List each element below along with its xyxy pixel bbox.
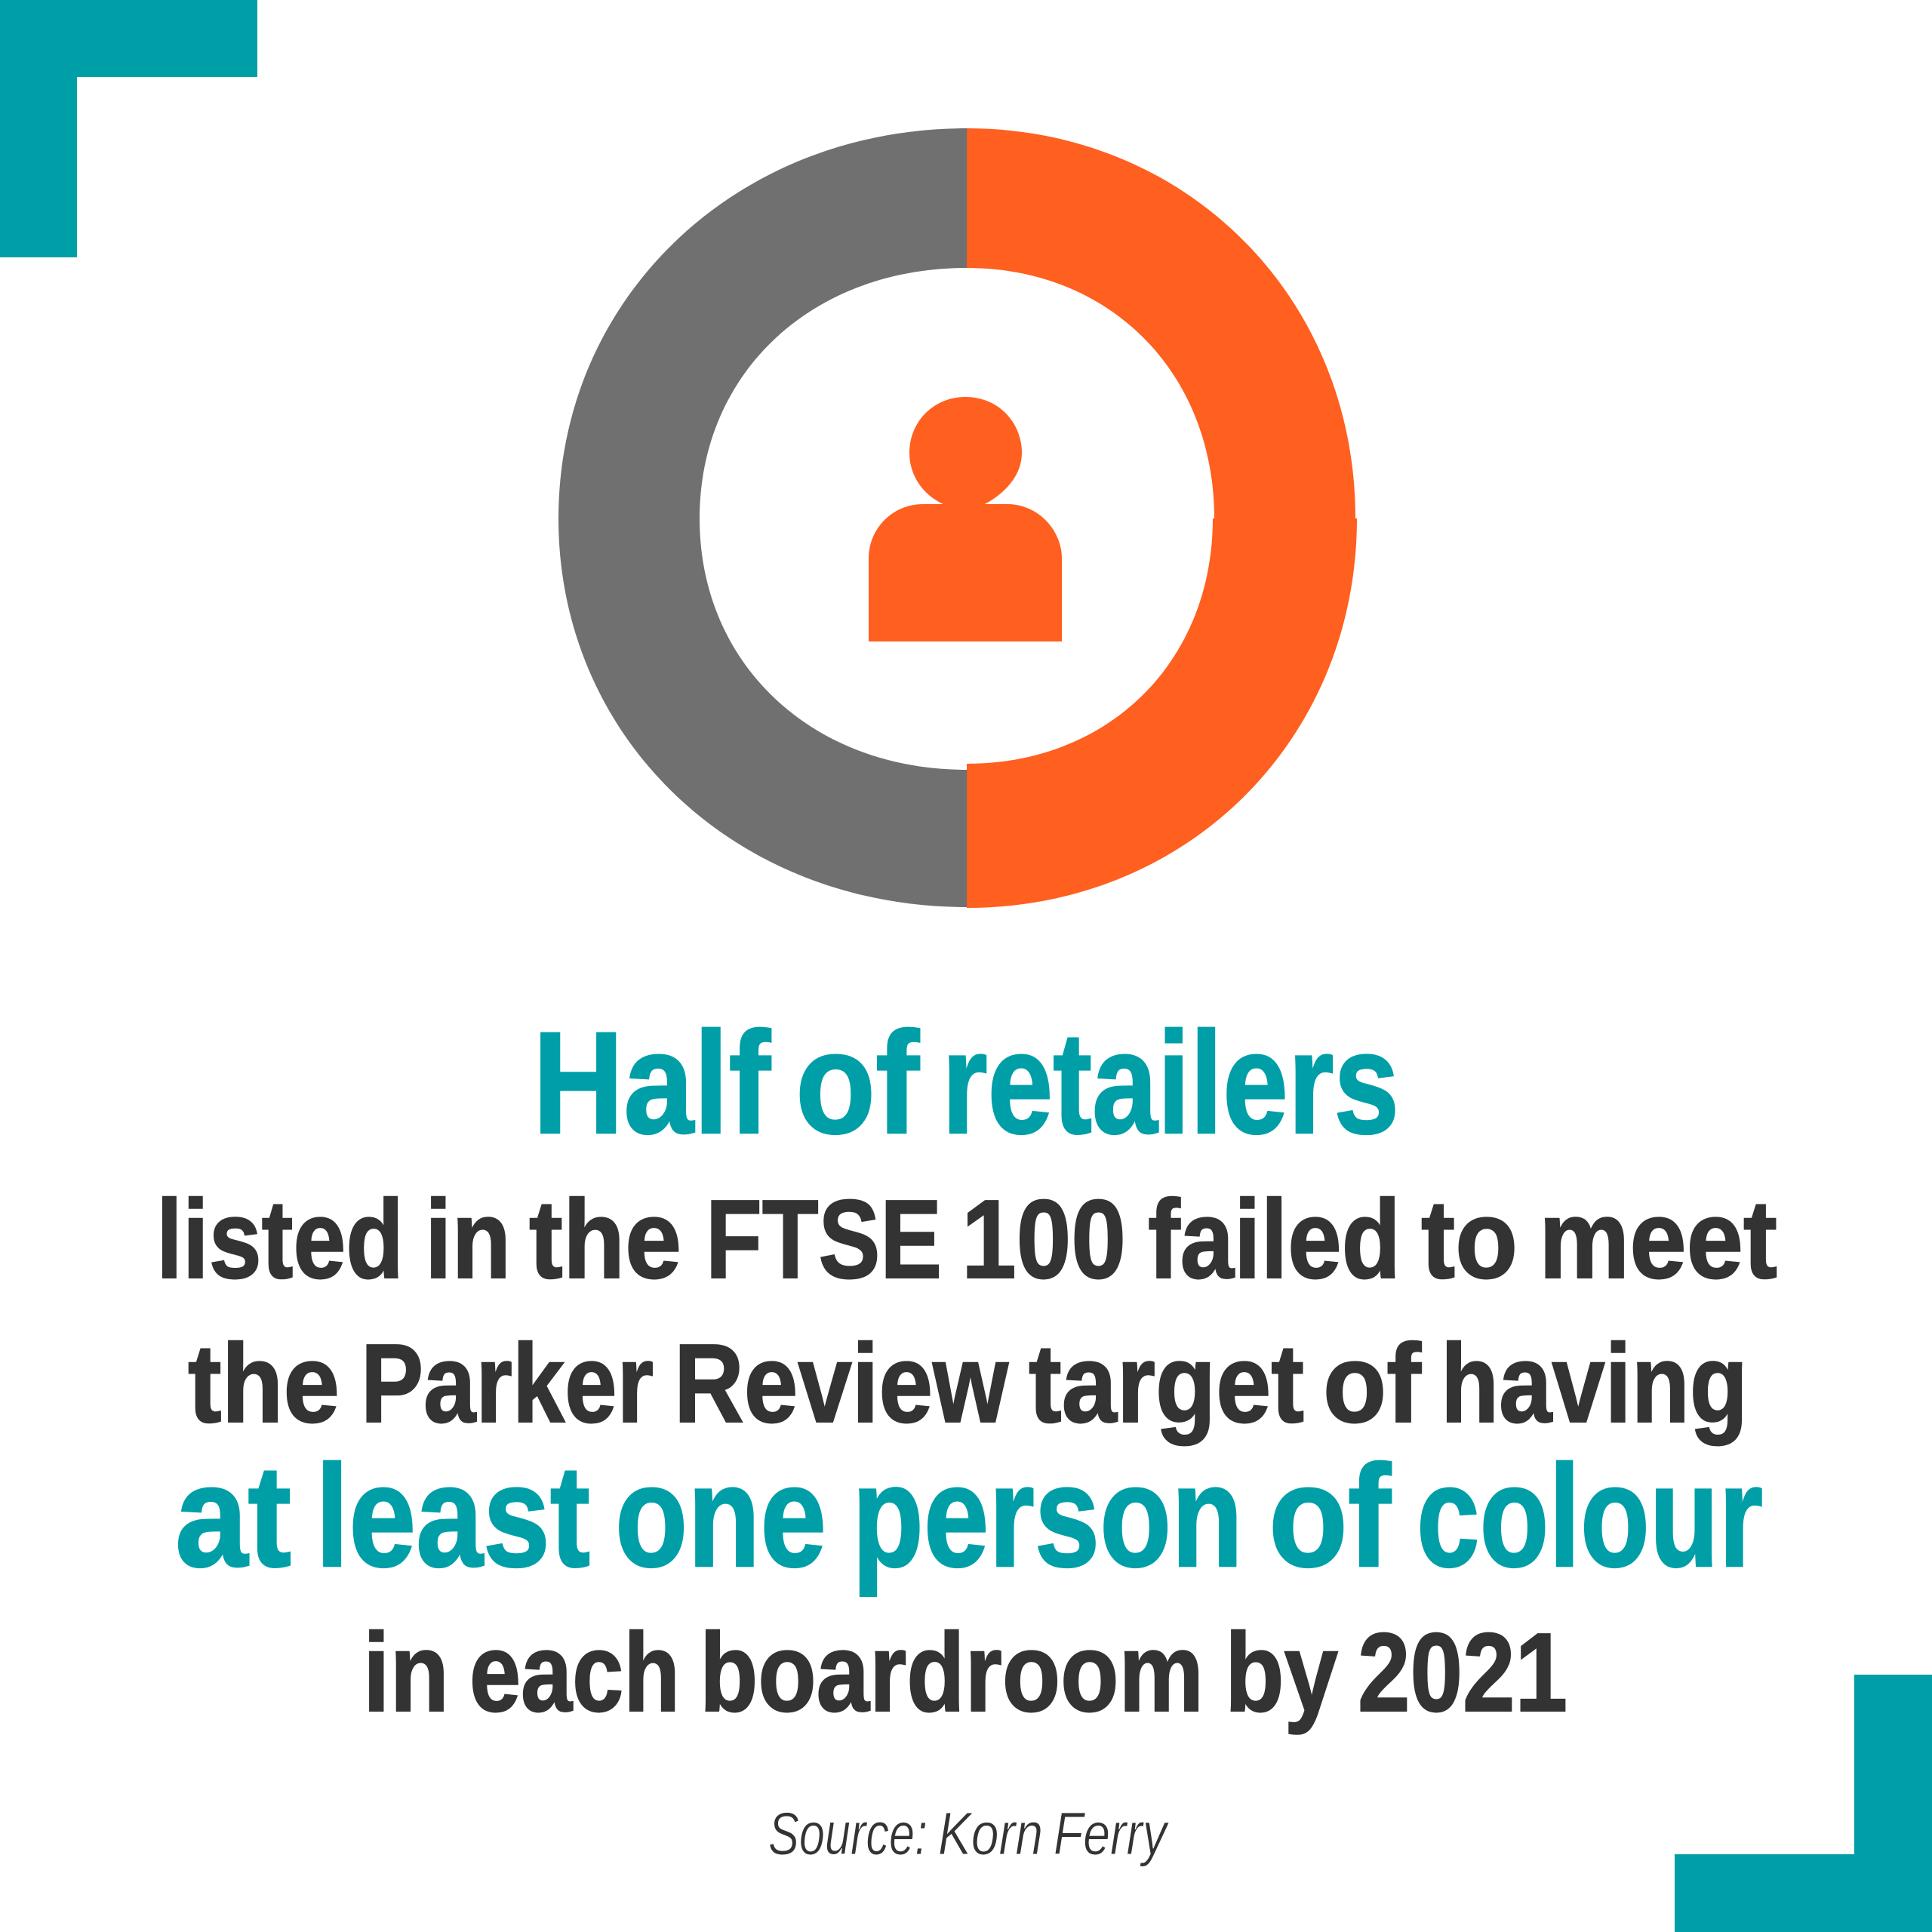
highlight: at least one person of colour: person <box>852 1435 1243 1597</box>
text line: Parker Review target: Parker <box>361 1321 654 1446</box>
highlight: at least one person of colour: at <box>175 1435 291 1597</box>
text line: in each boardroom by 2021 <box>363 1611 1567 1735</box>
text line: listed in the FTSE 100: 100 <box>961 1177 1126 1302</box>
highlight: half of retailers <box>533 1001 1399 1164</box>
text line: in each boardroom by 2021: each <box>469 1611 680 1735</box>
donut segment: orange half <box>967 128 1357 908</box>
highlight: half of retailers: of <box>795 1001 920 1164</box>
text line: Parker Review target: target <box>1029 1321 1304 1446</box>
donut chart: half of retailers <box>558 128 1357 908</box>
text line: Parker Review target: Review <box>674 1321 1009 1446</box>
source note: Ferry <box>1054 1800 1170 1867</box>
text line: in each boardroom by 2021: by <box>1225 1611 1338 1735</box>
corner bracket: bottom right <box>1675 1675 1932 1932</box>
highlight: half of retailers: Half <box>533 1001 771 1164</box>
icon: person <box>869 397 1062 641</box>
text line: listed in the FTSE 100: the <box>529 1177 681 1302</box>
text line: listed in the FTSE 100: in <box>425 1177 511 1302</box>
text line: Parker Review target: of <box>1323 1321 1422 1446</box>
text line: listed in the FTSE 100: meet <box>1539 1177 1777 1302</box>
headline text block <box>156 1001 1777 1735</box>
text line: in each boardroom by 2021: boardroom <box>700 1611 1204 1735</box>
corner bracket: top left <box>0 0 257 257</box>
text line: listed in the FTSE 100: failed <box>1148 1177 1401 1302</box>
source note: Korn <box>938 1800 1043 1867</box>
text line: in each boardroom by 2021: in <box>363 1611 449 1735</box>
highlight: at least one person of colour: least <box>315 1435 590 1597</box>
text line: Parker Review target: having <box>1441 1321 1748 1446</box>
highlight: half of retailers: retailers <box>942 1001 1399 1164</box>
text line: Parker Review target: the <box>188 1321 340 1446</box>
source note: Source: <box>768 1800 928 1867</box>
donut segment: grey half <box>558 128 967 907</box>
text line: listed in the FTSE 100: to <box>1421 1177 1518 1302</box>
highlight: at least one person of colour: of <box>1269 1435 1392 1597</box>
text line: listed in the FTSE 100: FTSE <box>706 1177 942 1302</box>
text line: Parker Review target <box>188 1321 1748 1446</box>
highlight: at least one person of colour <box>175 1435 1763 1597</box>
source note <box>768 1800 1170 1867</box>
highlight: at least one person of colour: colour <box>1417 1435 1763 1597</box>
text line: listed in the FTSE 100: listed <box>156 1177 404 1302</box>
text line: in each boardroom by 2021: 2021 <box>1358 1611 1567 1735</box>
highlight: at least one person of colour: one <box>615 1435 826 1597</box>
text line: listed in the FTSE 100 <box>156 1177 1777 1302</box>
